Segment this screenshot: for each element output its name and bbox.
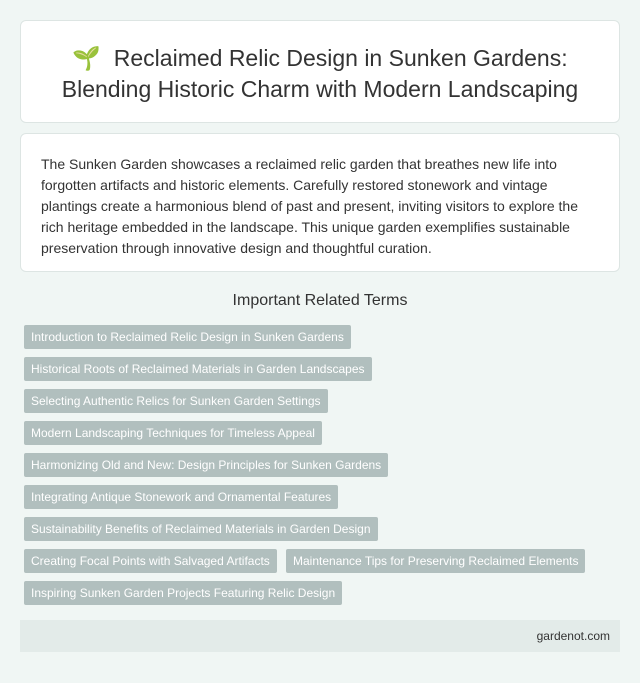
footer: gardenot.com xyxy=(537,629,610,643)
title xyxy=(62,45,578,102)
tags: Integrating Antique Stonework and Ornamental Features xyxy=(31,490,331,504)
title: Blending Historic Charm with Modern Landscaping xyxy=(62,76,578,102)
tags: Inspiring Sunken Garden Projects Featuring Relic Design xyxy=(31,586,335,600)
description panel xyxy=(20,133,620,272)
tags: Maintenance Tips for Preserving Reclaimed Elements xyxy=(293,554,578,568)
tags: Creating Focal Points with Salvaged Artifacts xyxy=(31,554,270,568)
tags: Introduction to Reclaimed Relic Design in Sunken Gardens xyxy=(31,330,344,344)
tags: Harmonizing Old and New: Design Principles for Sunken Gardens xyxy=(31,458,381,472)
related terms heading: Important Related Terms xyxy=(233,292,407,309)
tags: Historical Roots of Reclaimed Materials in Garden Landscapes xyxy=(31,362,364,376)
tags: Sustainability Benefits of Reclaimed Materials in Garden Design xyxy=(31,522,370,536)
footer xyxy=(20,620,620,652)
title: 🌱 Reclaimed Relic Design in Sunken Gardens: xyxy=(72,45,568,71)
tags: Selecting Authentic Relics for Sunken Garden Settings xyxy=(31,394,320,408)
tags: Modern Landscaping Techniques for Timeless Appeal xyxy=(31,426,315,440)
description text: The Sunken Garden showcases a reclaimed relic garden that breathes new life into forgotten artifacts and historic elements. Carefully restored stonework and vintage plantings create a harmonious blend of past and present, inviting visitors to explore the rich heritage embedded in the landscape. This unique garden exemplifies sustainable preservation through innovative design and thoughtful curation. xyxy=(41,156,578,256)
title box xyxy=(20,20,620,123)
